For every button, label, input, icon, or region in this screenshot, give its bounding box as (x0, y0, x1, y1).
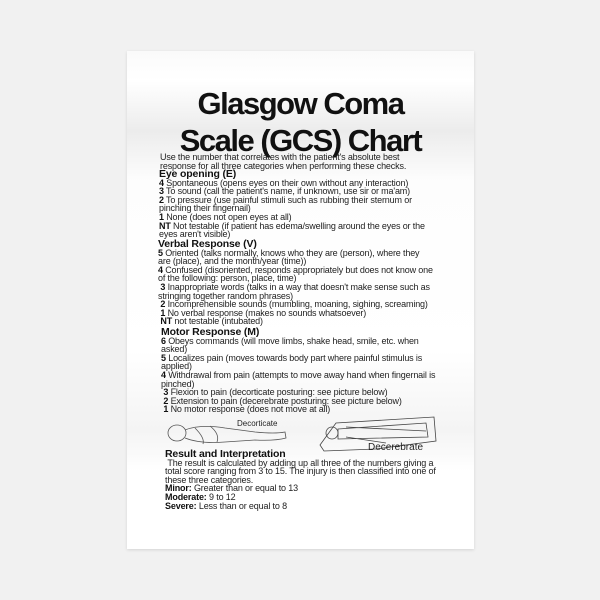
illustration: decerebrate (320, 416, 436, 453)
section: eye opening: pinching their fingernail) (159, 203, 251, 213)
section: motor response: 6 Obeys commands (will move limbs, shake head, smile, etc. when (161, 336, 419, 346)
section: motor response: 5 Localizes pain (moves towards body part where painful stimulus is (161, 353, 422, 363)
section: eye opening: NT Not testable (if patient has edema/swelling around the eyes or the (159, 221, 425, 231)
section: verbal response: stringing together random phrases) (158, 291, 293, 301)
section: motor response: 2 Extension to pain (decerebrate posturing: see picture below) (163, 396, 402, 406)
section: motor response (161, 326, 436, 414)
section: eye opening: 3 To sound (call the patient's name, if unknown, use sir or ma'am) (159, 186, 410, 196)
section: verbal response: 5 Oriented (talks normally, knows who they are (person), where they (158, 248, 419, 258)
section: motor response: applied) (161, 361, 192, 371)
section: eye opening: 2 To pressure (use painful stimuli such as rubbing their sternum or (159, 195, 412, 205)
intro text: response for all three categories when performing these checks. (160, 161, 406, 171)
section: eye opening: Eye opening (E) (159, 168, 236, 180)
section: result and interpretation (165, 448, 436, 511)
section: motor response: Motor Response (M) (161, 326, 259, 338)
illustration: decorticate: Decorticate (237, 419, 278, 428)
section: result and interpretation: Moderate: 9 to 12 (165, 492, 235, 502)
section: result and interpretation: Result and Interpretation (165, 448, 286, 460)
section: result and interpretation: Minor: Greater than or equal to 13 (165, 483, 298, 493)
section: verbal response: 4 Confused (disoriented, responds appropriately but does not know one (158, 265, 433, 275)
section: result and interpretation: The result is calculated by adding up all three of the numbers giving a (167, 458, 433, 468)
section: verbal response: 1 No verbal response (makes no sounds whatsoever) (160, 308, 366, 318)
section: verbal response: are (place), and the month/year (time)) (158, 256, 306, 266)
section: result and interpretation: total score ranging from 3 to 15. The injury is then classified into one of (165, 466, 436, 476)
section: verbal response (158, 238, 433, 326)
title (180, 86, 422, 158)
section: result and interpretation: these three categories. (165, 475, 253, 485)
section: result and interpretation: Severe: Less than or equal to 8 (165, 501, 287, 511)
intro text (160, 152, 406, 171)
section: verbal response: 2 Incomprehensible sounds (mumbling, moaning, sighing, screaming) (160, 299, 428, 309)
section: eye opening: 1 None (does not open eyes at all) (159, 212, 292, 222)
title: Glasgow Coma (198, 86, 403, 121)
intro text: Use the number that correlates with the patient's absolute best (160, 152, 399, 162)
section: eye opening: 4 Spontaneous (opens eyes on their own without any interaction) (159, 178, 408, 188)
section: motor response: 3 Flexion to pain (decorticate posturing: see picture below) (163, 387, 388, 397)
section: motor response: 4 Withdrawal from pain (attempts to move away hand when fingernail is (161, 370, 435, 380)
section: motor response: pinched) (161, 379, 194, 389)
section: eye opening: eyes aren't visible) (159, 229, 230, 239)
section: eye opening (159, 168, 425, 239)
section: verbal response: 3 Inappropriate words (talks in a way that doesn't make sense such as (160, 282, 430, 292)
poster panel (127, 51, 474, 549)
title: Scale (GCS) Chart (180, 123, 421, 158)
section: verbal response: NT not testable (intubated) (160, 316, 263, 326)
section: verbal response: Verbal Response (V) (158, 238, 257, 250)
section: motor response: 1 No motor response (does not move at all) (163, 404, 330, 414)
section: verbal response: of the following: person, place, time) (158, 273, 296, 283)
illustration: decerebrate: Decerebrate (368, 442, 423, 453)
section: motor response: asked) (161, 344, 187, 354)
illustration: decorticate (168, 419, 286, 444)
